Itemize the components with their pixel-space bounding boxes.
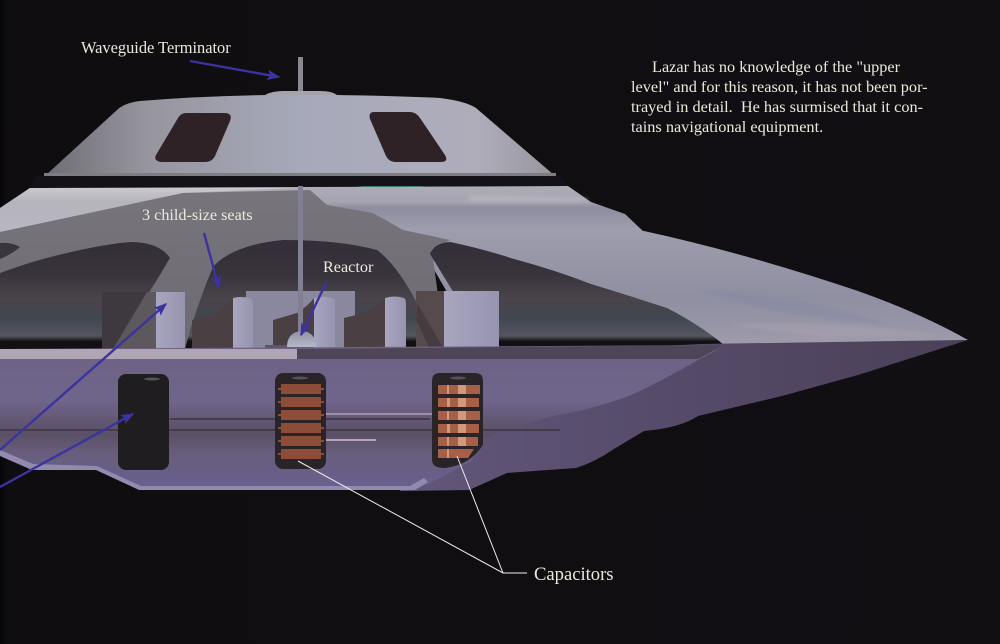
arrow: empty housing — [0, 414, 133, 487]
nose — [420, 231, 968, 349]
interior space centre — [185, 240, 443, 349]
upper dome — [46, 57, 554, 175]
right console — [416, 291, 499, 349]
note text: trayed in detail. He has surmised that it con- — [631, 97, 923, 116]
interior space left — [0, 242, 170, 349]
nose streaks — [470, 195, 940, 337]
interior space small — [0, 243, 20, 259]
hull bottom stripe — [0, 450, 428, 490]
empty capacitor housing — [118, 374, 169, 470]
note text: level" and for this reason, it has not been por- — [631, 77, 928, 96]
outer lower hull — [400, 340, 968, 491]
seats and consoles — [102, 291, 499, 349]
centre panel — [246, 291, 355, 349]
arrow: reactor — [301, 281, 327, 335]
arrow: left console — [0, 304, 166, 450]
arrow: seats — [204, 233, 219, 288]
upper hull band — [0, 186, 644, 240]
waveguide pole and base — [265, 57, 337, 95]
cutaway interior windows — [0, 240, 724, 349]
reactor sphere — [265, 331, 316, 349]
lower hull compartment — [0, 345, 724, 490]
left console — [102, 292, 185, 349]
note text: Lazar has no knowledge of the "upper — [652, 57, 901, 76]
label: seats: 3 child-size seats — [142, 206, 253, 224]
arrow: waveguide terminator — [190, 61, 279, 77]
interior space right — [430, 242, 724, 349]
leader lines: capacitors — [298, 456, 527, 573]
label: reactor: Reactor — [323, 258, 374, 276]
cyan glow — [356, 184, 424, 188]
note text: tains navigational equipment. — [631, 117, 823, 136]
label: capacitors: Capacitors — [534, 564, 614, 585]
note text — [631, 57, 928, 136]
middle hull and nose — [0, 186, 968, 350]
seat 2 — [273, 297, 335, 349]
central shaft — [298, 186, 303, 338]
label: waveguide terminator: Waveguide Terminator — [81, 38, 231, 57]
rim band — [30, 173, 568, 187]
gray cutaway wall — [0, 190, 450, 350]
bright top-left panel — [0, 188, 297, 232]
seat 1 — [192, 297, 253, 349]
seat 3 — [344, 296, 406, 349]
left window — [155, 113, 231, 162]
capacitor housing with bars right — [432, 373, 483, 468]
capacitor housing with bars centre — [275, 373, 326, 469]
right window — [370, 112, 446, 162]
